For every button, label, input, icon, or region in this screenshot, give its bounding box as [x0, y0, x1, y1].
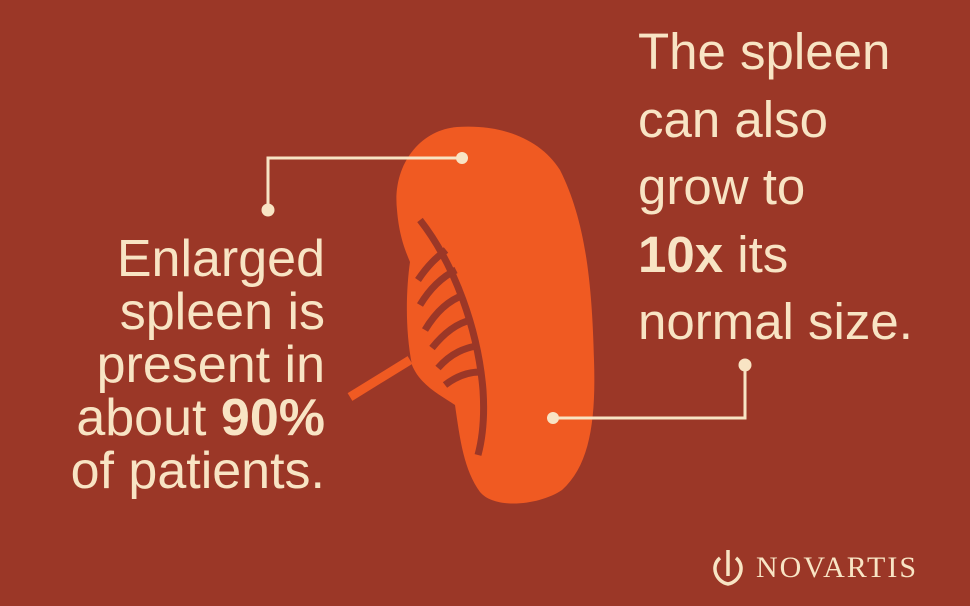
left text block: spleen is	[120, 283, 325, 341]
right text block: grow to	[638, 158, 805, 215]
left text block: about 90%	[76, 389, 325, 447]
left text block	[71, 230, 325, 500]
left text block: present in	[97, 336, 325, 394]
connector: right callout	[547, 360, 750, 424]
connector: left callout	[263, 152, 468, 215]
hilum trunk	[350, 360, 410, 397]
logo: novartis: NOVARTIS	[756, 551, 918, 584]
right text block: normal size.	[638, 293, 913, 350]
right text block: can also	[638, 90, 828, 148]
right text block	[638, 23, 913, 350]
right text block: The spleen	[638, 23, 890, 80]
right text block: 10x its	[638, 226, 788, 282]
left text block: of patients.	[71, 442, 325, 500]
left text block: Enlarged	[117, 230, 325, 288]
vessels (dark gaps)	[418, 220, 484, 455]
spleen organ	[350, 127, 594, 504]
